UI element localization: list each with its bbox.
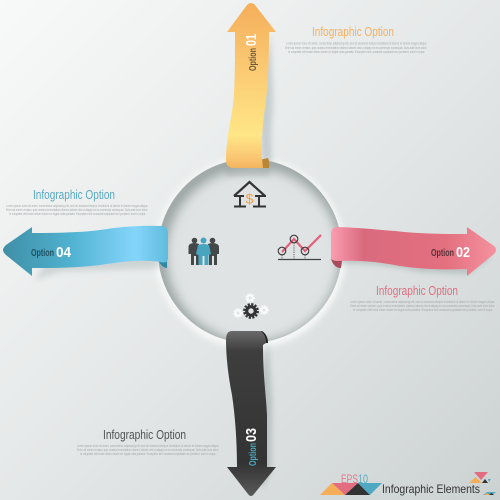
text block: option 03: [77, 428, 219, 456]
icon: house with dollar: $: [246, 190, 254, 206]
label: Option 02: 02: [456, 244, 470, 261]
arrow 03: black: [226, 331, 276, 496]
arrow 01: yellow: [226, 3, 276, 168]
label: Option 02: [431, 244, 470, 261]
text block: option 03: In voluptate velit esse cillum dolore eu fugiat nulla pariatur. Excepteur sint occaecat cupidatat non proident, sunt in culpa.: [80, 452, 216, 456]
text block: option 04: Lorem ipsum dolor sit amet, consectetur adipiscing elit, sed do eiusmod tempor incididunt ut labore et dolore magna aliqua.: [6, 204, 148, 208]
central circle: [154, 157, 348, 350]
text block: option 04: [6, 188, 148, 216]
logo: infographic elements: 10: [358, 472, 368, 486]
text block: option 03: Enim ad minim veniam, quis nostrud exercitation ullamco laboris nisi ut aliquip ex ea commodo consequat. Duis aute irure dolor.: [77, 448, 219, 452]
logo: infographic elements: EPS: [341, 472, 358, 486]
logo: infographic elements: [320, 472, 496, 496]
label: Option 04: Option: [31, 247, 54, 259]
text block: option 01: [285, 25, 427, 54]
icon: people: [188, 238, 219, 265]
label: Option 03: [243, 428, 260, 466]
text block: option 03: Lorem ipsum dolor sit amet, consectetur adipiscing elit, sed do eiusmod tempor incididunt ut labore et dolore magna aliqua.: [77, 444, 219, 448]
label: Option 03: Option: [247, 443, 259, 466]
label: Option 01: Option: [247, 48, 259, 71]
text block: option 01: Infographic Option: [312, 25, 394, 39]
label: Option 04: [31, 244, 72, 261]
text block: option 02: Infographic Option: [376, 284, 458, 298]
text block: option 04: Infographic Option: [33, 188, 115, 202]
text block: option 01: In voluptate velit esse cillum dolore eu fugiat nulla pariatur. Excepteur sint occaecat cupidatat non proident, sunt in culpa.: [288, 50, 425, 54]
icon: line chart: [278, 235, 321, 260]
text block: option 04: Enim ad minim veniam, quis nostrud exercitation ullamco laboris nisi ut aliquip ex ea commodo consequat. Duis aute irure dolor.: [6, 208, 148, 212]
icon: gears: [234, 294, 268, 318]
label: Option 03: 03: [243, 428, 260, 442]
text block: option 01: Lorem ipsum dolor sit amet, consectetur adipiscing elit, sed do eiusmod tempor incididunt ut labore et dolore magna aliqua.: [286, 42, 427, 46]
text block: option 03: Infographic Option: [103, 428, 186, 442]
arrow 02: pink: [331, 227, 496, 276]
text block: option 01: Enim ad minim veniam, quis nostrud exercitation ullamco laboris nisi ut aliquip ex ea commodo consequat. Duis aute irure dolor.: [285, 46, 427, 50]
label: Option 01: 01: [243, 34, 260, 46]
label: Option 04: 04: [56, 244, 72, 261]
icon: house with dollar: [234, 182, 266, 206]
text block: option 02: [350, 284, 495, 312]
arrow 04: blue: [3, 226, 168, 280]
text block: option 04: In voluptate velit esse cillum dolore eu fugiat nulla pariatur. Excepteur sint occaecat cupidatat non proident, sunt in culpa.: [9, 212, 146, 216]
label: Option 02: Option: [431, 247, 454, 259]
label: Option 01: [243, 34, 260, 71]
logo: infographic elements: Infographic Elements: [382, 482, 480, 496]
